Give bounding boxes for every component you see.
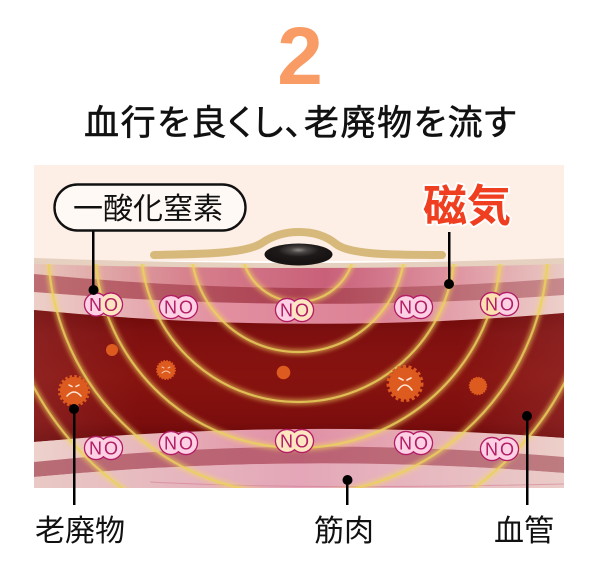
NO badge [84,293,122,316]
number 2: 2 [277,11,323,102]
NO badge: NO [485,440,514,460]
label: magnetism: 磁気 [423,182,511,231]
skin layer [154,232,442,255]
leader line: blood vessel [522,411,532,505]
label: blood vessel: 血管 [494,515,554,548]
skin background [34,165,564,261]
leader line: muscle [342,475,352,505]
NO badge [160,432,198,454]
NO badge: NO [164,298,193,318]
waste particle: large left, frowning [60,376,88,406]
magnetic field arcs [34,264,564,488]
label: nitric oxide pill: 一酸化窒素 [73,193,223,226]
NO badge: NO [399,434,428,454]
NO badge: NO [280,300,309,320]
waste particle: medium, frowning [157,361,175,379]
NO badge [84,436,122,460]
NO badges upper row [84,292,518,322]
blood vessel lower wall [34,429,564,488]
waste particle: small round [277,366,290,379]
NO badge: NO [89,438,118,458]
NO badges lower row [84,430,518,460]
NO badge [480,292,518,316]
NO badge [394,432,432,454]
waste particle: medium round [470,378,486,394]
leader line: waste [69,404,79,505]
blood vessel interior [34,310,564,442]
label: nitric oxide pill [54,184,246,230]
waste particles [60,344,486,406]
waste particle: large right, frowning [388,367,422,400]
NO badge [394,296,432,318]
NO badge [276,430,314,452]
NO badge: NO [280,432,309,452]
waste particle: small [106,344,118,356]
NO badge: NO [399,298,428,318]
panel: skin and blood vessel cross-section [34,165,564,488]
blood vessel upper wall [34,264,564,350]
icon: magnet [264,244,332,266]
NO badge [480,438,518,460]
leader line: nitric oxide [88,231,98,295]
leader line: magnetism [444,232,454,289]
title: 血行を良くし、老廃物を流す [84,104,516,143]
NO badge: NO [485,294,514,314]
skin surface band [34,258,564,272]
label: waste: 老廃物 [35,515,125,548]
NO badge [276,298,314,322]
NO badge: NO [164,434,193,454]
NO badge: NO [89,295,118,315]
NO badge [160,296,198,318]
label: muscle: 筋肉 [314,515,374,548]
